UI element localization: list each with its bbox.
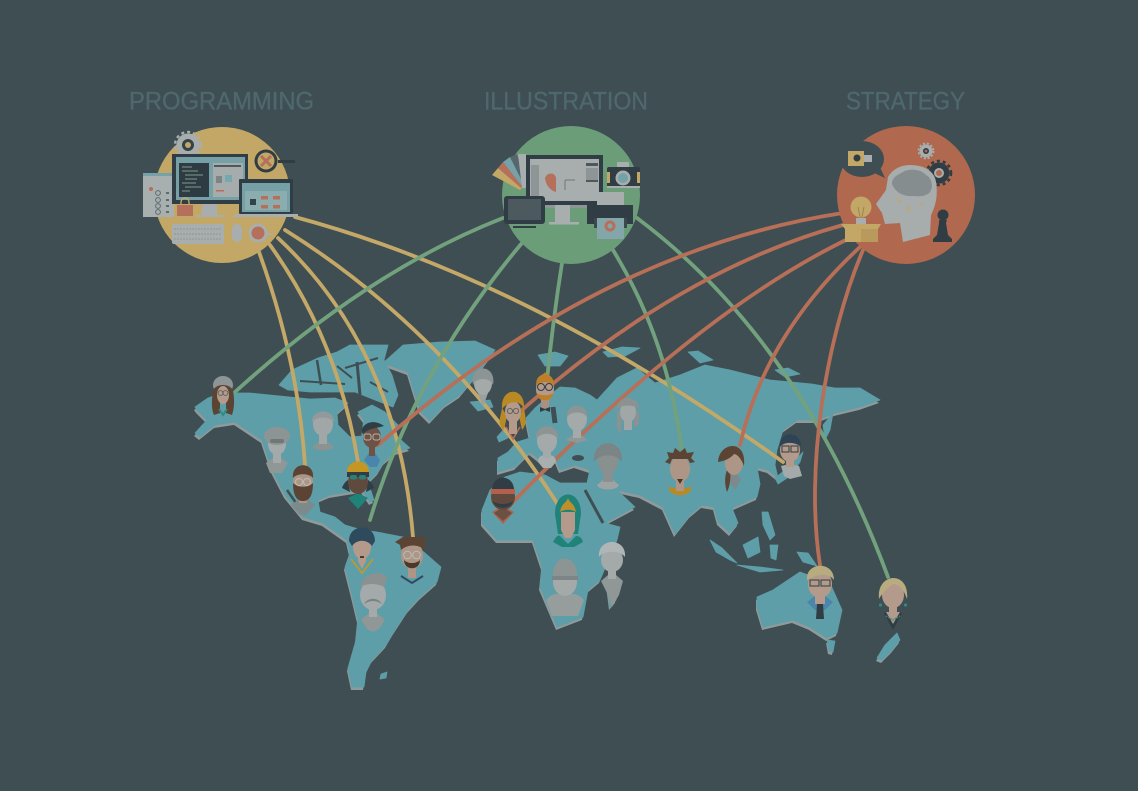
icon: form panel (143, 173, 174, 217)
avatar: grey woman, Russia (617, 398, 639, 434)
avatar: woman with glasses, east coast (362, 422, 384, 467)
icon: padlock (177, 198, 193, 216)
circle (837, 126, 975, 264)
avatar: grey person, west coast (264, 427, 290, 473)
avatar: bearded man, Mexico (291, 465, 315, 515)
avatars (212, 368, 907, 632)
panel: illustration circle (492, 126, 640, 264)
icon: magnifier (254, 150, 295, 172)
icon: desktop monitor (172, 154, 248, 217)
connection lines: illustration (235, 218, 888, 577)
heading: programming: PROGRAMMING (129, 88, 314, 116)
icon: small gear (918, 144, 934, 158)
avatar: blond man with blue collar and tie, Australia (807, 566, 834, 619)
avatar: man with spiky hair, India (665, 448, 695, 495)
icon: keyboard (172, 224, 224, 244)
icon: chess pawn (933, 210, 952, 242)
seas and channels (287, 358, 603, 523)
icon: gear (175, 132, 201, 158)
icon: head with brain (876, 165, 937, 242)
avatar: person in green hood, Central Africa (553, 494, 583, 547)
avatar: grey person, central Europe (536, 426, 558, 468)
circle (502, 126, 640, 264)
heading: illustration: ILLUSTRATION (484, 88, 648, 116)
icon: coffee cup (248, 224, 271, 242)
avatar: man with red bandana, West Africa (491, 478, 515, 524)
icon: drawing tablet (504, 196, 545, 228)
avatar: woman with orange hair, UK (500, 392, 526, 439)
map shadow (194, 344, 899, 690)
avatar: man with blue hair and square glasses, Korea (780, 434, 802, 479)
avatar: person in blue beanie, Colombia (349, 528, 375, 573)
map landmass (195, 341, 900, 687)
avatar: grey person, Russia west (566, 406, 588, 443)
avatar: woman with grey beanie, Alaska (212, 376, 234, 415)
connection lines: programming (259, 217, 783, 537)
icon: mouse (232, 224, 242, 242)
avatar: grey person, Iceland (473, 368, 493, 407)
avatar: man with brown hair and beard, Brazil (395, 537, 425, 583)
avatar: blonde woman with necklace, New Zealand (879, 578, 907, 630)
avatar: grey person with glasses, East Africa (599, 542, 625, 607)
icon: large gear (927, 161, 951, 185)
connection lines: strategy (378, 213, 863, 565)
icon: camera (607, 162, 640, 188)
avatar: person in yellow cap (342, 462, 374, 509)
icon: laptop (234, 179, 298, 217)
avatar: woman with ponytail, China (718, 446, 744, 492)
icon: printer (587, 192, 633, 239)
panel: programming circle (143, 127, 298, 263)
icon: light bulb in box (841, 196, 881, 242)
icon: colour swatch fan (492, 154, 526, 190)
icon: speech bubble with camera (840, 141, 885, 178)
avatar: grey person with curly hair, Middle East (594, 443, 622, 490)
icon: monitor with drawing app (526, 155, 603, 224)
avatar: grey person in cap, South Africa (546, 558, 584, 616)
world map (194, 341, 900, 690)
avatar: grey person, Canada (312, 412, 334, 451)
panel: strategy circle (837, 126, 975, 264)
avatar: man with orange hair and bow tie (536, 372, 554, 412)
avatar: grey man with moustache, Andes (360, 573, 387, 632)
heading: strategy: STRATEGY (846, 88, 965, 116)
circle (154, 127, 290, 263)
